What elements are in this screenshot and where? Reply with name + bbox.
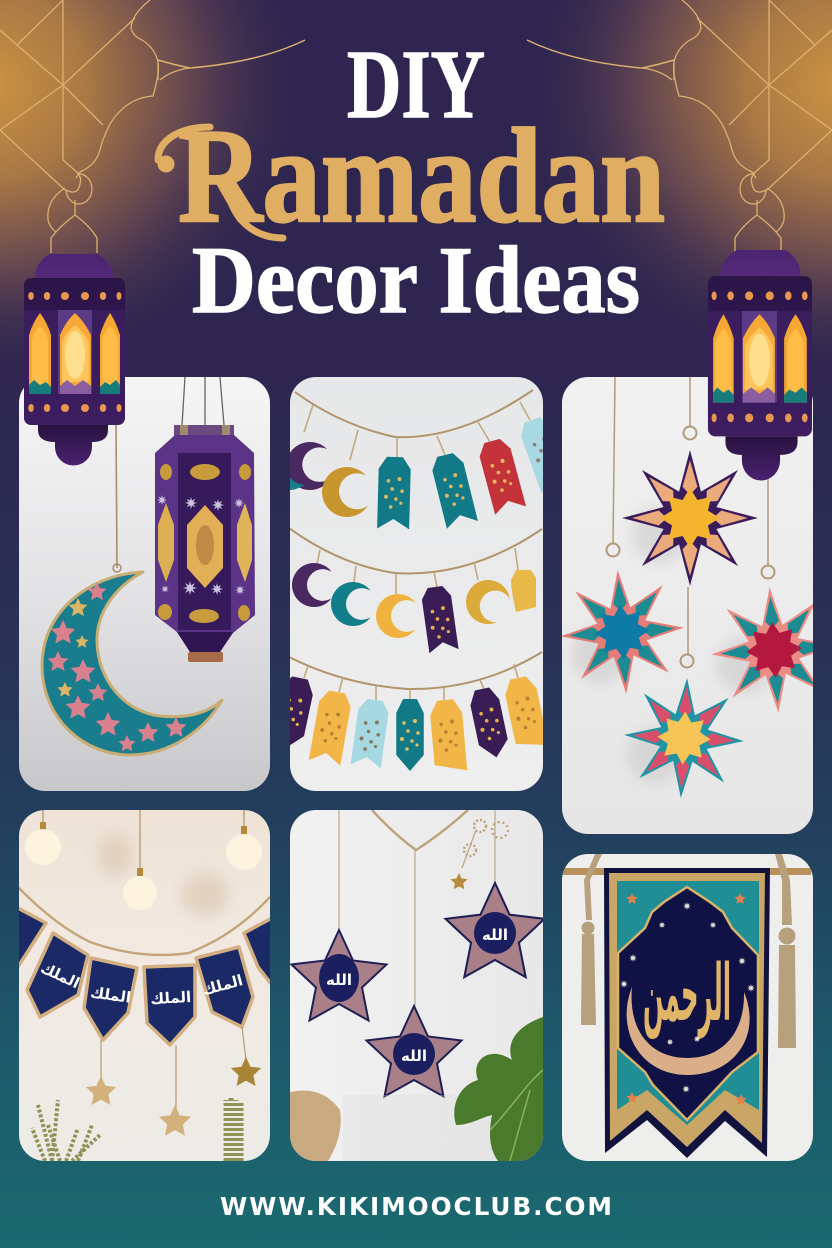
title line: Decor Ideas: Decor Ideas	[192, 227, 640, 333]
floral accents	[626, 893, 747, 1105]
dried flowers	[290, 1090, 445, 1161]
garland row 1	[290, 389, 543, 530]
bunting flags: الملك	[150, 988, 192, 1008]
panel: five-point calligraphy stars	[290, 810, 544, 1161]
star with calligraphy centre	[366, 1006, 462, 1096]
twine for moon	[116, 425, 117, 568]
banner	[604, 868, 770, 1158]
bunting twine	[18, 887, 270, 955]
coral and blue star	[562, 570, 684, 694]
hanging gold stars	[86, 1027, 261, 1136]
coral and crimson star	[711, 587, 813, 713]
title line: DIY: DIY	[347, 31, 485, 138]
crescent	[627, 987, 750, 1075]
website footer: WWW.KIKIMOOCLUB.COM	[220, 1192, 612, 1221]
dried greenery	[32, 1098, 241, 1161]
banner navy arch	[618, 887, 758, 1120]
tassels	[581, 854, 796, 1048]
strings and rings	[606, 377, 774, 668]
garland row 3	[290, 651, 543, 771]
hanging strings	[339, 810, 495, 1010]
star with calligraphy centre: الله	[401, 1047, 427, 1065]
monstera plant	[454, 1017, 543, 1161]
panel: felt garlands	[290, 377, 543, 791]
teal and yellow star	[621, 675, 747, 801]
star with calligraphy right: الله	[482, 926, 508, 944]
star with calligraphy left: الله	[326, 971, 352, 989]
purple and gold star	[622, 450, 758, 586]
panel: paper lantern and crescent moon	[19, 377, 270, 791]
bunting flags: الملك	[38, 959, 82, 992]
star with calligraphy right	[446, 883, 544, 977]
purple paper lantern	[155, 425, 255, 662]
wooden rod	[563, 868, 811, 875]
star with calligraphy left	[292, 883, 544, 1096]
small gold star	[450, 873, 468, 889]
title line: Ramadan: Ramadan	[178, 102, 665, 251]
lantern right	[708, 250, 812, 481]
warm wall shadows	[97, 833, 229, 917]
title	[158, 31, 665, 333]
decorative arch left	[0, 0, 305, 253]
lantern left	[24, 254, 125, 465]
branch	[372, 810, 508, 868]
soft shadows	[572, 507, 773, 783]
panel: embroidered calligraphy wall banner	[562, 854, 813, 1161]
bunting flags	[16, 907, 272, 1045]
bunting flags: الملك	[201, 971, 245, 999]
hanging strings	[182, 377, 224, 425]
bunting flags: الملك	[89, 983, 132, 1007]
crescent moon ornament	[42, 564, 222, 755]
panel: calligraphy bunting and globe lights	[16, 810, 272, 1161]
garland row 2	[289, 528, 542, 653]
decorative arch right	[527, 0, 832, 253]
panel: hanging eight-point paper stars	[556, 377, 832, 834]
R swash flourish	[158, 127, 283, 238]
globe lights	[25, 810, 262, 910]
tiny stars	[620, 902, 755, 1093]
